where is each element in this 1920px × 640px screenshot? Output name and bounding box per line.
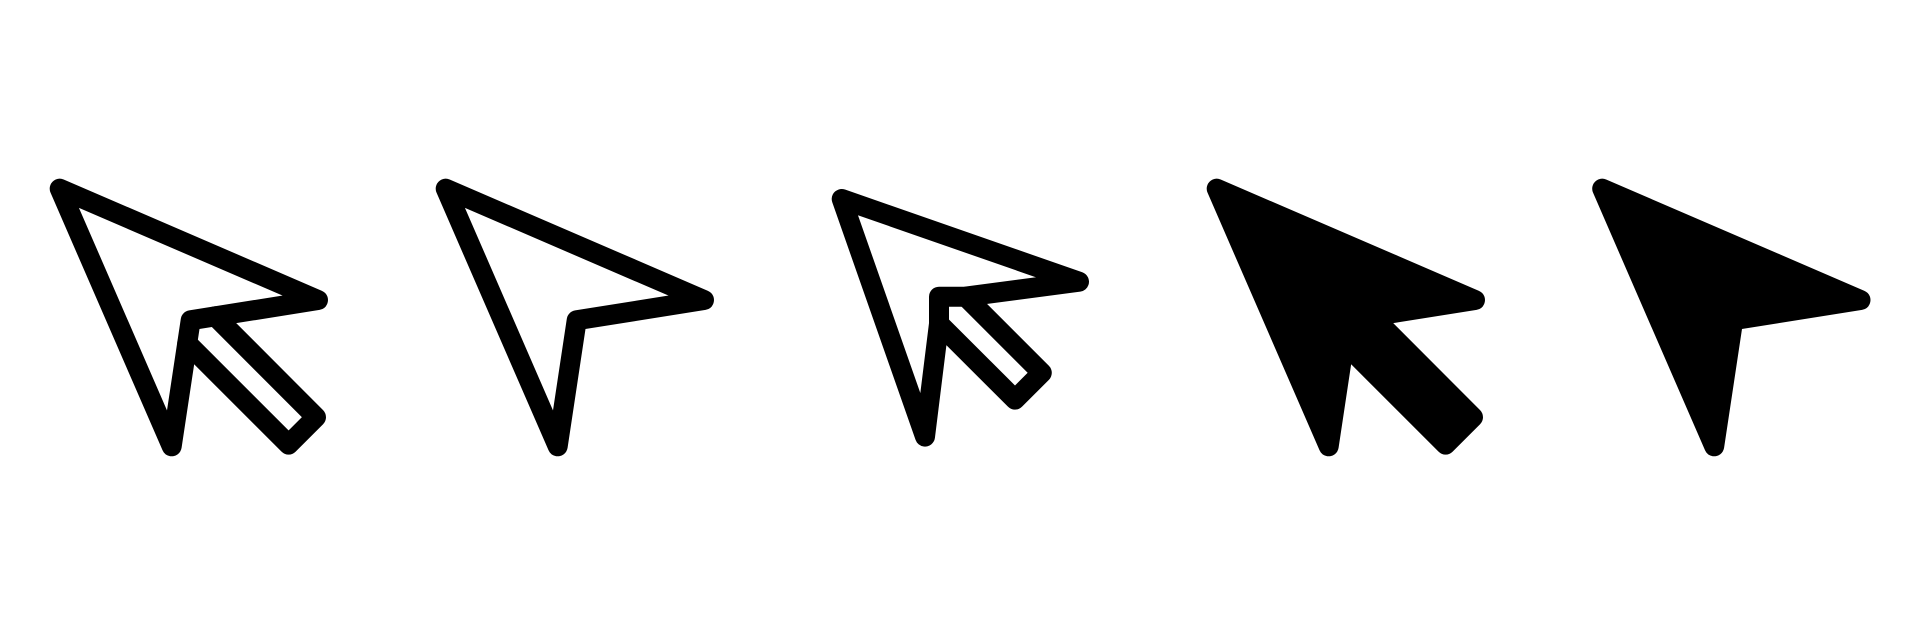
icon: outlined cursor with squared notch — [842, 199, 1079, 437]
icon: solid cursor with tail — [1217, 189, 1475, 446]
icon: outlined cursor with tail — [60, 189, 318, 446]
icon: solid arrowhead — [1602, 189, 1860, 446]
icon: outlined arrowhead — [446, 189, 704, 446]
